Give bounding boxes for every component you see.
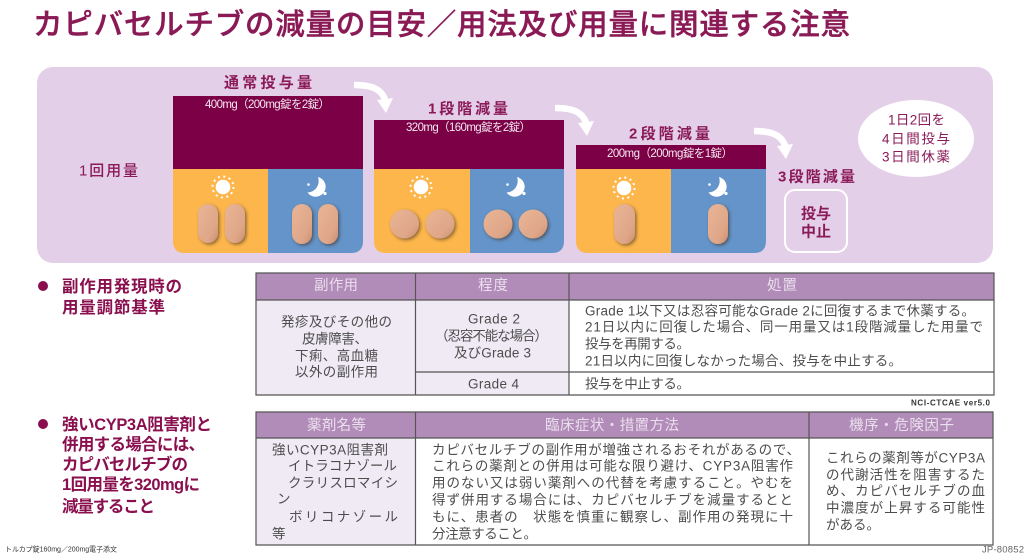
mechanism cell: [826, 450, 985, 532]
treatment cell: 投与を中止する。: [585, 376, 690, 392]
treatment cell: 21日以内に回復した場合、同一用量又は1段階減量した用量で: [585, 318, 983, 334]
drug names cell: 強いCYP3A阻害剤: [272, 442, 388, 458]
drug column fill: [256, 438, 416, 545]
discontinue box: [785, 190, 847, 252]
clinical symptoms cell: 用のない又は弱い薬剤への代替を考慮すること。やむを: [432, 476, 793, 490]
heading: CYP3A inhibitors: 強いCYP3A阻害剤と: [62, 415, 212, 434]
dose bar: [374, 120, 564, 169]
callout: schedule: [858, 100, 974, 177]
dose bar: [173, 96, 363, 169]
dose text: 400mg（200mg錠を2錠）: [205, 98, 330, 111]
callout: schedule: 4日間投与: [882, 132, 950, 146]
clinical symptoms cell: 得ず併用する場合には、カピバセルチブを減量するとと: [432, 492, 793, 508]
header labels: 臨床症状・措置方法: [545, 417, 680, 434]
mechanism cell: の代謝活性を阻害するた: [826, 468, 985, 482]
step: usual dose: [173, 74, 363, 253]
dose text: 200mg（200mg錠を1錠）: [607, 147, 733, 160]
document code: JP-80852: [982, 544, 1024, 556]
heading: CYP3A inhibitors: カピバセルチブの: [62, 454, 188, 474]
clinical symptoms cell: もに、患者の 状態を慎重に観察し、副作用の発現に十: [432, 510, 793, 524]
header labels: [314, 277, 797, 294]
tablets: single oval, morning and evening: [614, 204, 728, 244]
step: third reduction: [778, 168, 855, 252]
label: dose per administration: 1回用量: [79, 162, 138, 180]
treatment cell: [585, 302, 983, 392]
adverse reaction cell: [281, 314, 392, 380]
icon: moon: [506, 177, 526, 197]
evening panel: [268, 169, 363, 253]
step heading: 通常投与量: [224, 74, 312, 92]
heading: dose adjustment criteria: 副作用発現時の: [62, 277, 182, 296]
treatment cell: 投与を再開する。: [585, 336, 690, 352]
note: CTCAE version: NCI-CTCAE ver5.0: [911, 398, 991, 408]
icon: moon: [307, 177, 327, 197]
drug names cell: 等: [272, 526, 286, 542]
clinical symptoms cell: [432, 442, 800, 542]
adverse reaction cell: 以外の副作用: [295, 364, 378, 380]
grade cell: Grade 2: [468, 312, 520, 326]
header labels: 副作用: [314, 277, 358, 294]
adverse reaction cell: 下痢、高血糖: [295, 348, 378, 364]
step heading: 2段階減量: [629, 124, 710, 142]
morning panel: [173, 169, 268, 253]
header labels: [307, 416, 954, 434]
heading: dose adjustment criteria: 用量調節基準: [62, 297, 165, 317]
clinical symptoms cell: これらの薬剤との併用は可能な限り避け、CYP3A阻害作: [432, 458, 793, 474]
drug names cell: クラリスロマイシ: [288, 476, 398, 490]
icon: moon: [708, 177, 728, 197]
treatment column fill: [569, 300, 994, 395]
tablets: oval, morning and evening: [198, 204, 338, 244]
mechanism cell: これらの薬剤等がCYP3A: [826, 450, 985, 466]
callout: schedule: 3日間休薬: [882, 150, 950, 164]
title: カピバセルチブの減量の目安／用法及び用量に関連する注意: [33, 8, 850, 42]
treatment cell: Grade 1以下又は忍容可能なGrade 2に回復するまで休薬する。: [585, 302, 975, 318]
grade cell: （忍容不能な場合）: [435, 328, 548, 344]
step heading: 1段階減量: [428, 100, 508, 118]
heading: CYP3A inhibitors: 1回用量を320mgに: [62, 475, 200, 494]
drug names cell: ン: [277, 492, 290, 506]
treatment cell: 21日以内に回復しなかった場合、投与を中止する。: [585, 352, 902, 368]
dose text: 320mg（160mg錠を2錠）: [406, 121, 531, 134]
evening panel: [671, 169, 766, 253]
step: first reduction: [374, 100, 564, 253]
table: CYP3A inhibitors: [256, 412, 993, 545]
adverse reaction cell: 発疹及びその他の: [281, 314, 392, 330]
discontinue text: 投与: [801, 204, 831, 222]
header labels: 薬剤名等: [307, 416, 366, 434]
body fill: [416, 438, 993, 545]
arrow: level 1 to level 2: [555, 108, 594, 136]
step: second reduction: [576, 124, 766, 253]
header labels: 処置: [767, 277, 797, 294]
table header: [256, 273, 994, 300]
table header: [256, 412, 993, 438]
icon: sun: [212, 176, 234, 198]
first column fill: [256, 300, 569, 395]
icon: sun: [614, 178, 634, 198]
dose bar: [576, 145, 766, 169]
icon: sun: [410, 176, 432, 198]
heading: CYP3A inhibitors: 併用する場合には、: [62, 435, 205, 454]
panel: dose reduction steps: [37, 67, 993, 263]
step heading: 3段階減量: [778, 168, 855, 186]
discontinue text line 2: 中止: [801, 224, 831, 240]
mechanism cell: 中濃度が上昇する可能性: [826, 500, 985, 516]
morning panel: [576, 169, 671, 253]
evening panel: [470, 169, 564, 253]
mechanism cell: がある。: [826, 518, 880, 532]
tablets: round, morning and evening: [390, 210, 548, 238]
grade cell: [435, 312, 548, 392]
drug names cell: [272, 442, 398, 542]
table: adverse reactions: [256, 273, 994, 395]
heading: dose adjustment criteria: [38, 277, 182, 317]
clinical symptoms cell: 分注意すること。: [432, 526, 537, 542]
mechanism cell: め、カピバセルチブの血: [826, 482, 985, 498]
heading: CYP3A inhibitors: [38, 415, 212, 516]
footnote: source: トルカプ錠160mg／200mg電子添文: [5, 544, 117, 554]
grade cell: 及びGrade 3: [454, 346, 531, 360]
header labels: 程度: [478, 277, 508, 294]
morning panel: [374, 169, 470, 253]
callout: schedule: 1日2回を: [888, 112, 945, 128]
heading: CYP3A inhibitors: 減量すること: [62, 497, 155, 516]
arrow: level 2 to level 3: [754, 131, 793, 159]
header labels: 機序・危険因子: [849, 417, 954, 434]
adverse reaction cell: 皮膚障害、: [302, 332, 368, 346]
drug names cell: イトラコナゾール: [288, 458, 397, 474]
grade cell: Grade 4: [468, 376, 519, 392]
arrow: usual to level 1: [354, 85, 393, 113]
drug names cell: ボリコナゾール: [289, 510, 398, 524]
clinical symptoms cell: カピバセルチブの副作用が増強されるおそれがあるので、: [432, 442, 800, 458]
